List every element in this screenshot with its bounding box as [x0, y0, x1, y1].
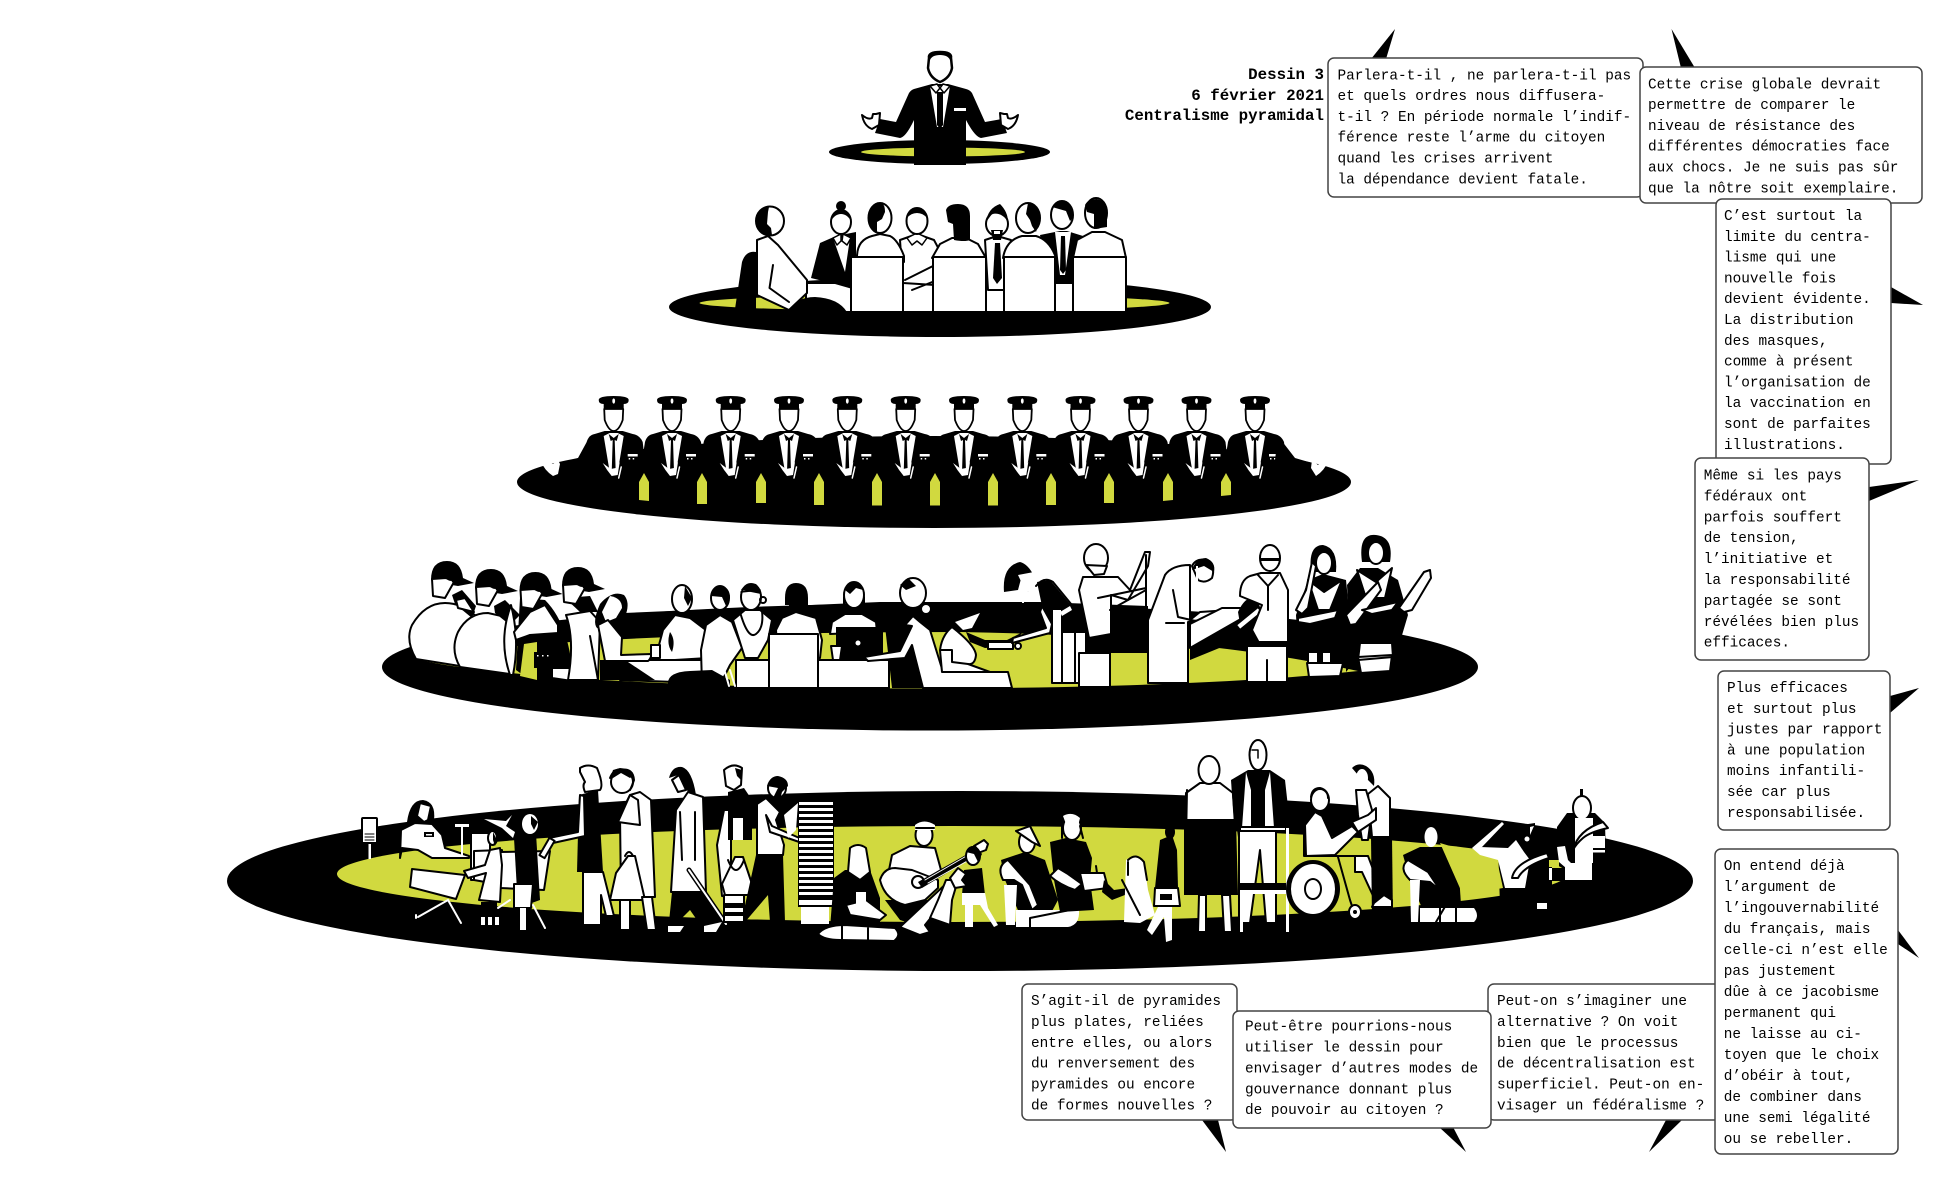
text: et quels ordres nous diffusera-: [1338, 89, 1605, 105]
text: pyramides ou encore: [1031, 1077, 1195, 1093]
tail: [1898, 930, 1919, 958]
back-facing person c: [1003, 203, 1056, 312]
text: de formes nouvelles ?: [1031, 1098, 1212, 1114]
box: [1715, 849, 1898, 1154]
text: [1724, 859, 1888, 1148]
box: [1716, 199, 1891, 464]
text: pas justement: [1724, 964, 1836, 980]
seated man in black: [1403, 827, 1477, 922]
text: férence reste l’arme du citoyen: [1338, 131, 1605, 147]
long-coated woman with cane: [668, 767, 726, 932]
text: la vaccination en: [1724, 396, 1871, 412]
text: [1704, 468, 1859, 652]
man with white collar: [900, 208, 950, 290]
text: superficiel. Peut-on en-: [1497, 1077, 1704, 1093]
man from behind: [668, 586, 742, 688]
text: de pouvoir au citoyen ?: [1245, 1103, 1444, 1119]
lime ground: [337, 826, 1567, 922]
text: ne laisse au ci-: [1724, 1027, 1862, 1043]
tier 3: officers: [517, 396, 1351, 528]
text: sée car plus: [1727, 785, 1831, 801]
text: quand les crises arrivent: [1338, 152, 1553, 168]
text: partagée se sont: [1704, 594, 1842, 610]
guitarist: [880, 822, 988, 935]
tail: [1439, 1127, 1466, 1152]
text: parfois souffert: [1704, 510, 1842, 526]
row of twelve officers: [580, 396, 1289, 486]
man holding baby: [1352, 764, 1393, 920]
till and shopper area: [471, 833, 550, 890]
speech bubble 3: [1716, 199, 1923, 464]
caption: Dessin 3: [1125, 66, 1324, 125]
text: efficaces.: [1704, 636, 1790, 652]
bent woman in white coat: [988, 562, 1086, 683]
tier 5: citizens: [227, 740, 1693, 971]
text: La distribution: [1724, 313, 1854, 329]
person with curly hair and raised arm: [484, 814, 545, 930]
text: permanent qui: [1724, 1006, 1836, 1022]
text: responsabilisée.: [1727, 806, 1865, 822]
text: justes par rapport: [1727, 723, 1882, 739]
child with guitar: [950, 846, 998, 927]
caption: Dessin 3: Dessin 3: [1248, 66, 1324, 84]
text: l’ingouvernabilité: [1724, 901, 1879, 917]
text: celle-ci n’est elle: [1724, 943, 1888, 959]
doctor in long coat and patient: [1148, 558, 1283, 683]
woman in black dress: [539, 766, 614, 925]
man with mohawk: [1549, 789, 1608, 881]
woman with basket: [1050, 814, 1130, 912]
text: une semi légalité: [1724, 1111, 1871, 1127]
seated woman with phone: [818, 845, 898, 941]
text: Parlera-t-il , ne parlera-t-il pas: [1338, 68, 1631, 84]
text: ou se rebeller.: [1724, 1132, 1853, 1148]
speech bubble 7: [1022, 984, 1237, 1152]
black backdrop band: [624, 602, 1148, 653]
payment terminal: [362, 818, 377, 859]
text: d’obéir à tout,: [1724, 1069, 1853, 1085]
text: la responsabilité: [1704, 573, 1851, 589]
woman with necklace: [733, 584, 772, 658]
text: lisme qui une: [1724, 251, 1836, 267]
meeting table: [806, 283, 1126, 312]
text: permettre de comparer le: [1648, 98, 1855, 114]
disc: [227, 791, 1693, 971]
bearded man with tie: [985, 204, 1011, 290]
box: [1718, 671, 1890, 830]
text: S’agit-il de pyramides: [1031, 994, 1221, 1010]
text: C’est surtout la: [1724, 209, 1863, 225]
speech bubble 4: [1695, 458, 1919, 660]
text: On entend déjà: [1724, 859, 1845, 875]
text: de combiner dans: [1724, 1090, 1862, 1106]
text: aux chocs. Je ne suis pas sûr: [1648, 160, 1898, 176]
veiled woman: [1122, 856, 1155, 923]
text: visager un fédéralisme ?: [1497, 1098, 1704, 1114]
man with phone: [744, 776, 808, 922]
back-facing person a: [851, 203, 904, 312]
text: fédéraux ont: [1704, 489, 1807, 505]
woman front chair: [769, 583, 822, 688]
office tables: [620, 660, 889, 688]
text: [1724, 209, 1871, 454]
text: [1338, 68, 1631, 188]
text: plus plates, reliées: [1031, 1015, 1204, 1031]
text: gouvernance donnant plus: [1245, 1082, 1452, 1098]
text: Plus efficaces: [1727, 681, 1848, 697]
woman with laptop: [830, 582, 883, 661]
box: [1328, 58, 1643, 197]
text: [1497, 994, 1704, 1114]
text: différentes démocraties face: [1648, 140, 1890, 156]
text: du renversement des: [1031, 1057, 1195, 1073]
text: entre elles, ou alors: [1031, 1036, 1212, 1052]
lime gaps between officers: [639, 473, 1231, 506]
back-facing woman: [932, 204, 986, 312]
speech bubble 1: [1328, 29, 1643, 197]
text: moins infantili-: [1727, 764, 1865, 780]
person with shopping bag: [717, 765, 752, 922]
text: l’initiative et: [1704, 552, 1833, 568]
text: l’argument de: [1724, 880, 1836, 896]
text: comme à présent: [1724, 355, 1854, 371]
woman with bun: [811, 201, 856, 290]
box: [1022, 984, 1237, 1120]
text: et surtout plus: [1727, 702, 1857, 718]
text: révélées bien plus: [1704, 615, 1859, 631]
stack of goods: [798, 801, 834, 924]
text: niveau de résistance des: [1648, 119, 1855, 135]
person leaning with headphones: [1440, 822, 1552, 909]
text: utiliser le dessin pour: [1245, 1040, 1444, 1056]
disc: [669, 277, 1211, 337]
text: du français, mais: [1724, 922, 1871, 938]
text: la dépendance devient fatale.: [1338, 172, 1588, 188]
woman from behind: [1184, 756, 1240, 932]
tier 2: board meeting: [669, 198, 1211, 337]
caption: Dessin 3: Centralisme pyramidal: [1125, 107, 1324, 125]
speech bubble 6: [1715, 849, 1919, 1154]
text: Même si les pays: [1704, 468, 1842, 484]
text: de décentralisation est: [1497, 1057, 1696, 1073]
text: à une population: [1727, 743, 1865, 759]
text: [1031, 994, 1221, 1114]
text: illustrations.: [1724, 438, 1845, 454]
seated person left: [735, 206, 847, 312]
man with walker: [1231, 740, 1290, 932]
tail: [1869, 480, 1919, 501]
text: que la nôtre soit exemplaire.: [1648, 181, 1898, 197]
box: [1488, 984, 1720, 1120]
text: [1648, 77, 1898, 197]
tier 1: leader on small disc: [829, 51, 1050, 165]
reclining person with pale hair: [940, 613, 1023, 672]
text: dûe à ce jacobisme: [1724, 985, 1879, 1001]
text: nouvelle fois: [1724, 271, 1836, 287]
tail: [1649, 1120, 1682, 1152]
text: sont de parfaites: [1724, 417, 1871, 433]
child pushing trolley: [464, 831, 502, 925]
seated man with cap: [1000, 826, 1079, 927]
outer arms and hands: [541, 436, 1328, 484]
wheelchair user: [1286, 788, 1384, 919]
disc: [382, 604, 1478, 730]
tail: [1891, 287, 1923, 305]
standing man with glasses: [1240, 545, 1299, 682]
tail: [1890, 688, 1919, 713]
lime ground: [416, 632, 1358, 688]
disc: [517, 436, 1351, 528]
text: l’organisation de: [1724, 375, 1871, 391]
text: Peut-être pourrions-nous: [1245, 1020, 1452, 1036]
woman at desk: [590, 594, 655, 680]
text: envisager d’autres modes de: [1245, 1061, 1478, 1077]
surgical nurse: [1079, 544, 1150, 687]
man in print shirt: [651, 585, 711, 660]
speech bubble 8: [1233, 1011, 1491, 1152]
text: alternative ? On voit: [1497, 1015, 1678, 1031]
text: devient évidente.: [1724, 292, 1871, 308]
man in black suit: [1040, 201, 1083, 284]
shopping trolley: [410, 869, 465, 923]
box: [1695, 458, 1869, 660]
woman seen from behind reaching to table: [864, 578, 1012, 688]
text: bien que le processus: [1497, 1036, 1678, 1052]
text: [1727, 681, 1882, 822]
two masked women with books: [1296, 535, 1431, 677]
tail: [1672, 29, 1695, 68]
disc: [829, 140, 1050, 164]
text: toyen que le choix: [1724, 1048, 1879, 1064]
girl with bag: [1147, 825, 1180, 942]
riot police: [409, 561, 605, 681]
text: t-il ? En période normale l’indif-: [1338, 110, 1631, 126]
box: [1233, 1011, 1491, 1128]
speech bubble 2: [1640, 29, 1922, 203]
text: des masques,: [1724, 334, 1828, 350]
tier 4: services: [382, 535, 1478, 730]
text: Cette crise globale devrait: [1648, 77, 1881, 93]
text: [1245, 1020, 1478, 1119]
cashier: [400, 800, 469, 858]
back-facing person d: [1073, 198, 1126, 312]
text: de tension,: [1704, 531, 1799, 547]
speech bubble 9: [1488, 984, 1720, 1152]
leader figure: [862, 51, 1018, 165]
caption: Dessin 3: 6 février 2021: [1191, 87, 1324, 105]
tail: [1202, 1120, 1226, 1152]
curly-haired woman with bag: [610, 768, 656, 930]
tail: [1371, 29, 1395, 59]
text: limite du centra-: [1724, 230, 1871, 246]
text: Peut-on s’imaginer une: [1497, 994, 1687, 1010]
box: [1640, 67, 1922, 203]
speech bubble 5: [1718, 671, 1919, 830]
